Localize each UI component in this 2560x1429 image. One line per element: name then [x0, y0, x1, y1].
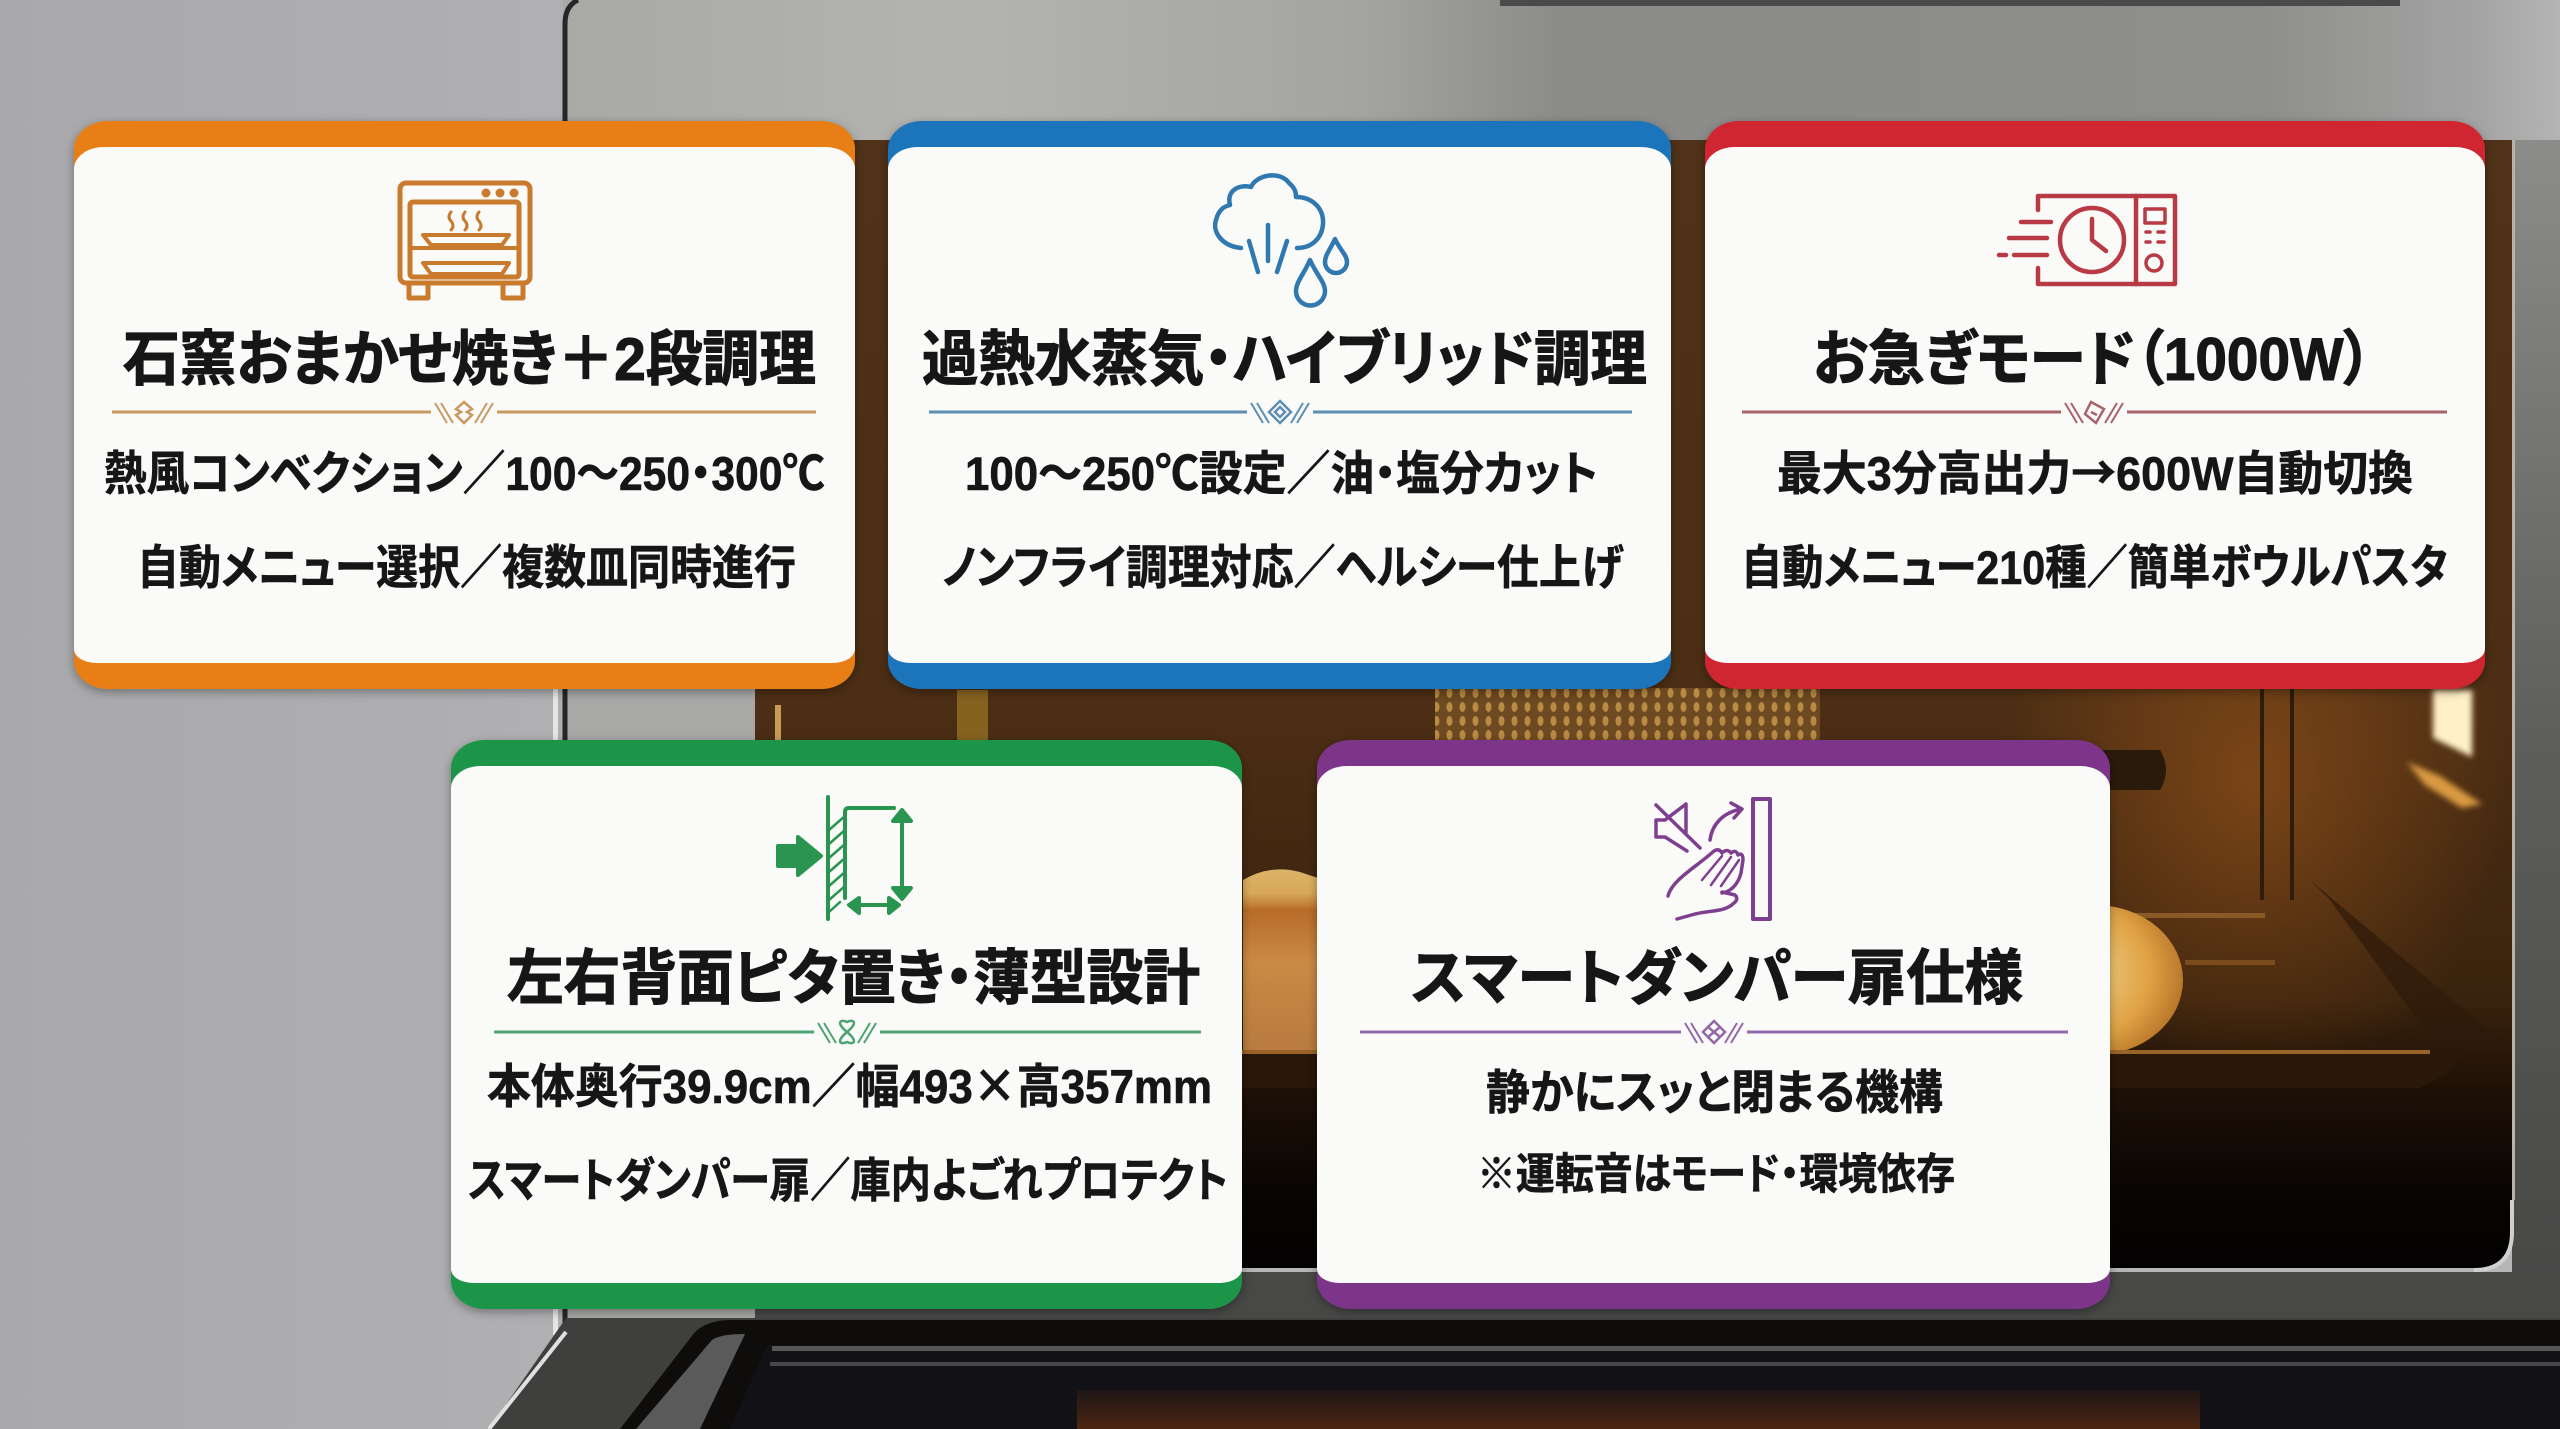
divider ornament	[1742, 402, 2447, 423]
card body	[888, 147, 1671, 663]
divider ornament	[1360, 1021, 2068, 1043]
card body	[451, 766, 1242, 1283]
heading: スマートダンパー扉仕様	[1411, 945, 2023, 1012]
panel: スマートダンパー扉	[1317, 740, 2110, 1309]
spec line 2: 自動メニュー210種／簡単ボウルパスタ	[1741, 541, 2448, 594]
divider ornament	[929, 401, 1632, 423]
card frame	[1317, 740, 2110, 1309]
divider ornament	[112, 402, 816, 423]
card frame	[1705, 121, 2485, 689]
card frame	[451, 740, 1242, 1309]
spec line 1: 熱風コンベクション／100～250・300℃	[104, 447, 825, 500]
panel: 石窯おまかせ焼き	[74, 121, 855, 689]
spec line 1: 静かにスッと閉まる機構	[1486, 1066, 1943, 1119]
panel: 過熱水蒸気	[888, 121, 1671, 689]
spec line 2: スマートダンパー扉／庫内よごれプロテクト	[468, 1154, 1228, 1207]
spec line 2: ノンフライ調理対応／ヘルシー仕上げ	[942, 541, 1624, 594]
card body	[74, 147, 855, 663]
spec line 1: 100～250℃設定／油・塩分カット	[965, 447, 1598, 500]
icon: steam cloud and drops	[1215, 175, 1347, 306]
heading: 過熱水蒸気・ハイブリッド調理	[922, 326, 1647, 393]
heading: 左右背面ピタ置き・薄型設計	[507, 945, 1200, 1012]
spec line 1: 最大3分高出力→600W自動切換	[1777, 435, 2413, 504]
icon: fast microwave	[1999, 196, 2175, 284]
spec line 2: 自動メニュー選択／複数皿同時進行	[137, 541, 796, 594]
heading: 石窯おまかせ焼き＋2段調理	[123, 326, 816, 393]
icon: quiet door and hand	[1656, 799, 1770, 919]
card body	[1705, 147, 2485, 663]
divider ornament	[494, 1021, 1201, 1043]
card frame	[888, 121, 1671, 689]
panel: 左右背面ピタ置き	[451, 740, 1242, 1309]
spec line 2: ※運転音はモード・環境依存	[1477, 1151, 1955, 1199]
panel: お急ぎモード	[1705, 121, 2485, 689]
icon: oven	[400, 183, 530, 298]
heading: お急ぎモード（1000W）	[1813, 326, 2372, 393]
card body	[1317, 766, 2110, 1283]
card frame	[74, 121, 855, 689]
spec line 1: 本体奥行39.9cm／幅493×高357mm	[487, 1048, 1212, 1117]
icon: flush wall placement	[778, 797, 911, 919]
